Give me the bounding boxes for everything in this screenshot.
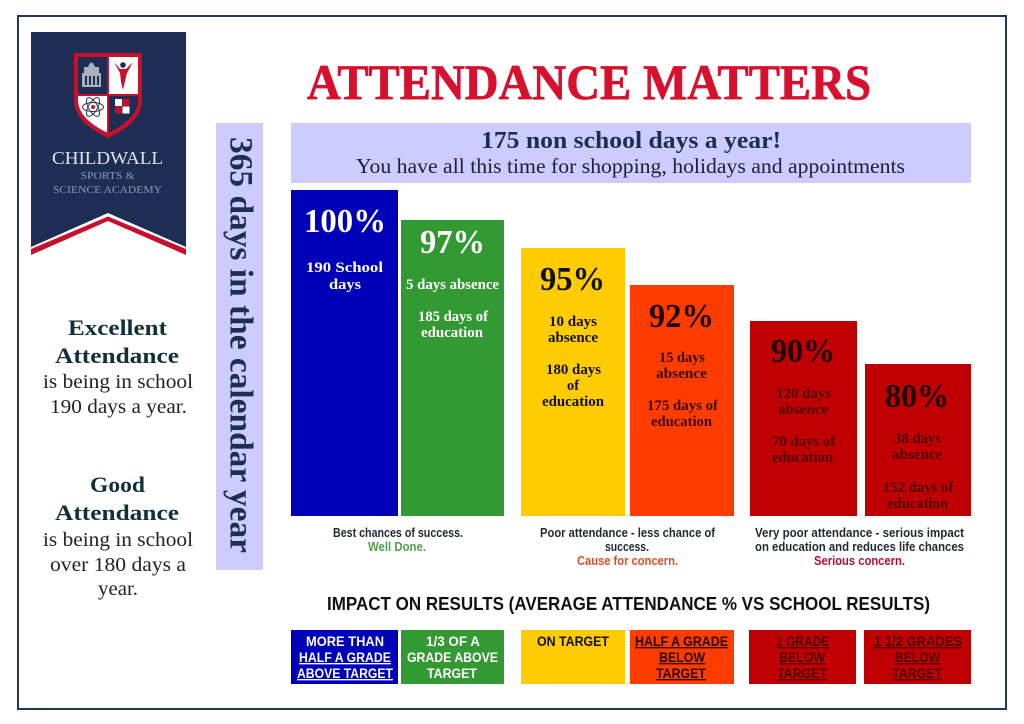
bar: 80%: 152 days of (883, 480, 953, 496)
bar: 92% (630, 285, 734, 516)
panel: good attendance (43, 472, 193, 600)
panel: excellent attendance (43, 315, 193, 418)
impact box: third of a grade above: 1/3 OF A (426, 634, 480, 649)
school name: SCIENCE ACADEMY (53, 184, 162, 196)
caption: best chances (333, 526, 463, 554)
caption: very poor attendance: Serious concern. (814, 554, 905, 568)
band subheading: You have all this time for shopping, holidays and appointments (356, 154, 905, 178)
impact box: 1 grade below: BELOW (779, 650, 825, 665)
bar: 97%: 97% (420, 224, 485, 261)
impact box: third of a grade above: GRADE ABOVE (407, 650, 498, 665)
banner background (31, 32, 186, 247)
impact box: 1 1/2 grades below: TARGET (892, 666, 943, 681)
banner chevron (31, 216, 186, 255)
caption: best chances: Best chances of success. (333, 526, 463, 540)
impact box: on target: ON TARGET (537, 634, 610, 649)
crest icon: athlete (114, 62, 133, 90)
bar: 90%: education (772, 450, 833, 466)
bar: 80%: 38 days (894, 431, 941, 447)
bar: 92%: 92% (649, 298, 714, 335)
impact box: more than half a grade above: HALF A GRADE (299, 650, 391, 665)
panel: excellent attendance: is being in school (43, 371, 193, 393)
bar: 100%: days (329, 277, 361, 293)
bar: 95%: of (567, 378, 579, 394)
bar: 97% (401, 220, 504, 516)
bar: 92%: absence (656, 366, 708, 382)
bar: 92%: 175 days of (647, 398, 718, 414)
impact box: half a grade below: BELOW (659, 650, 705, 665)
caption: poor attendance: success. (605, 540, 649, 554)
impact heading: IMPACT ON RESULTS (AVERAGE ATTENDANCE % VS SCHOOL RESULTS) (327, 593, 930, 614)
school logo banner (31, 32, 186, 255)
bar: 95%: 95% (540, 261, 605, 298)
bar: 95%: 180 days (546, 362, 601, 378)
panel: good attendance: Attendance (55, 500, 179, 525)
caption: poor attendance: Cause for concern. (577, 554, 678, 568)
crest icon: atom (82, 96, 104, 118)
bar: 80%: 80% (885, 378, 949, 415)
impact box: 1 1/2 grades below: BELOW (895, 650, 940, 665)
panel: good attendance: is being in school (43, 529, 193, 551)
school name: CHILDWALL (52, 148, 163, 168)
band heading: 175 non school days a year! (481, 128, 781, 154)
bar: 90%: 90% (771, 333, 835, 370)
side band text: 365 days in the calendar year (222, 137, 258, 553)
caption: poor attendance (540, 526, 716, 568)
bar: 100%: 100% (304, 203, 386, 240)
bar: 80% (865, 364, 971, 516)
impact box: 1 1/2 grades below: 1 1/2 GRADES (874, 634, 962, 649)
school name (52, 148, 163, 196)
bar: 95%: 10 days (549, 314, 597, 330)
impact box: 1 grade below: 1 GRADE (776, 634, 829, 649)
bar: 90%: 70 days of (772, 434, 835, 450)
bar: 97%: 5 days absence (406, 277, 500, 293)
impact box: half a grade below: TARGET (656, 666, 707, 681)
impact box: half a grade below (630, 630, 734, 684)
panel: excellent attendance: 190 days a year. (50, 396, 187, 418)
impact box: third of a grade above (401, 630, 504, 684)
crest icon: chequered squares (115, 99, 130, 114)
bar: 92%: 15 days (659, 350, 705, 366)
panel: good attendance: over 180 days a (50, 554, 186, 576)
bar: 80%: absence (892, 447, 943, 463)
panel: excellent attendance: Excellent (68, 315, 168, 340)
panel: 365 days side band (216, 123, 263, 570)
impact box: third of a grade above: TARGET (427, 666, 478, 681)
impact box: more than half a grade above: ABOVE TARGET (297, 666, 394, 681)
panel: good attendance: Good (90, 472, 145, 497)
bar: 90%: 120 days (776, 386, 831, 402)
impact box: more than half a grade above: MORE THAN (306, 634, 384, 649)
bar: 95%: education (542, 394, 604, 410)
impact box: more than half a grade above (291, 630, 398, 684)
bar: 100%: 190 School (306, 260, 383, 276)
impact box: 1 grade below: TARGET (777, 666, 828, 681)
bar: 80%: education (887, 496, 948, 512)
bar: 95%: absence (548, 330, 599, 346)
panel: good attendance: year. (98, 578, 138, 600)
panel: 175 non school days (291, 123, 971, 183)
caption: best chances: Well Done. (368, 540, 426, 554)
impact box: 1 1/2 grades below (864, 630, 971, 684)
impact box: 1 grade below (749, 630, 856, 684)
panel: excellent attendance: Attendance (55, 343, 179, 368)
bar: 90%: absence (778, 402, 829, 418)
bar: 97%: 185 days of (418, 309, 488, 325)
caption: very poor attendance (755, 526, 965, 568)
impact box: on target (521, 630, 625, 684)
bar: 90% (750, 321, 857, 516)
school name: SPORTS & (80, 170, 135, 182)
caption: very poor attendance: Very poor attendance - serious impact (755, 526, 965, 540)
crest icon: building (82, 62, 101, 87)
bar: 92%: education (651, 414, 712, 430)
school crest (74, 53, 142, 138)
caption: poor attendance: Poor attendance - less chance of (540, 526, 716, 540)
caption: very poor attendance: on education and reduces life chances (755, 540, 964, 554)
bar: 95% (521, 248, 625, 516)
bar: 97%: education (421, 325, 483, 341)
title: ATTENDANCE MATTERS (307, 54, 871, 110)
impact box: half a grade below: HALF A GRADE (635, 634, 728, 649)
bar: 100% (291, 190, 398, 516)
